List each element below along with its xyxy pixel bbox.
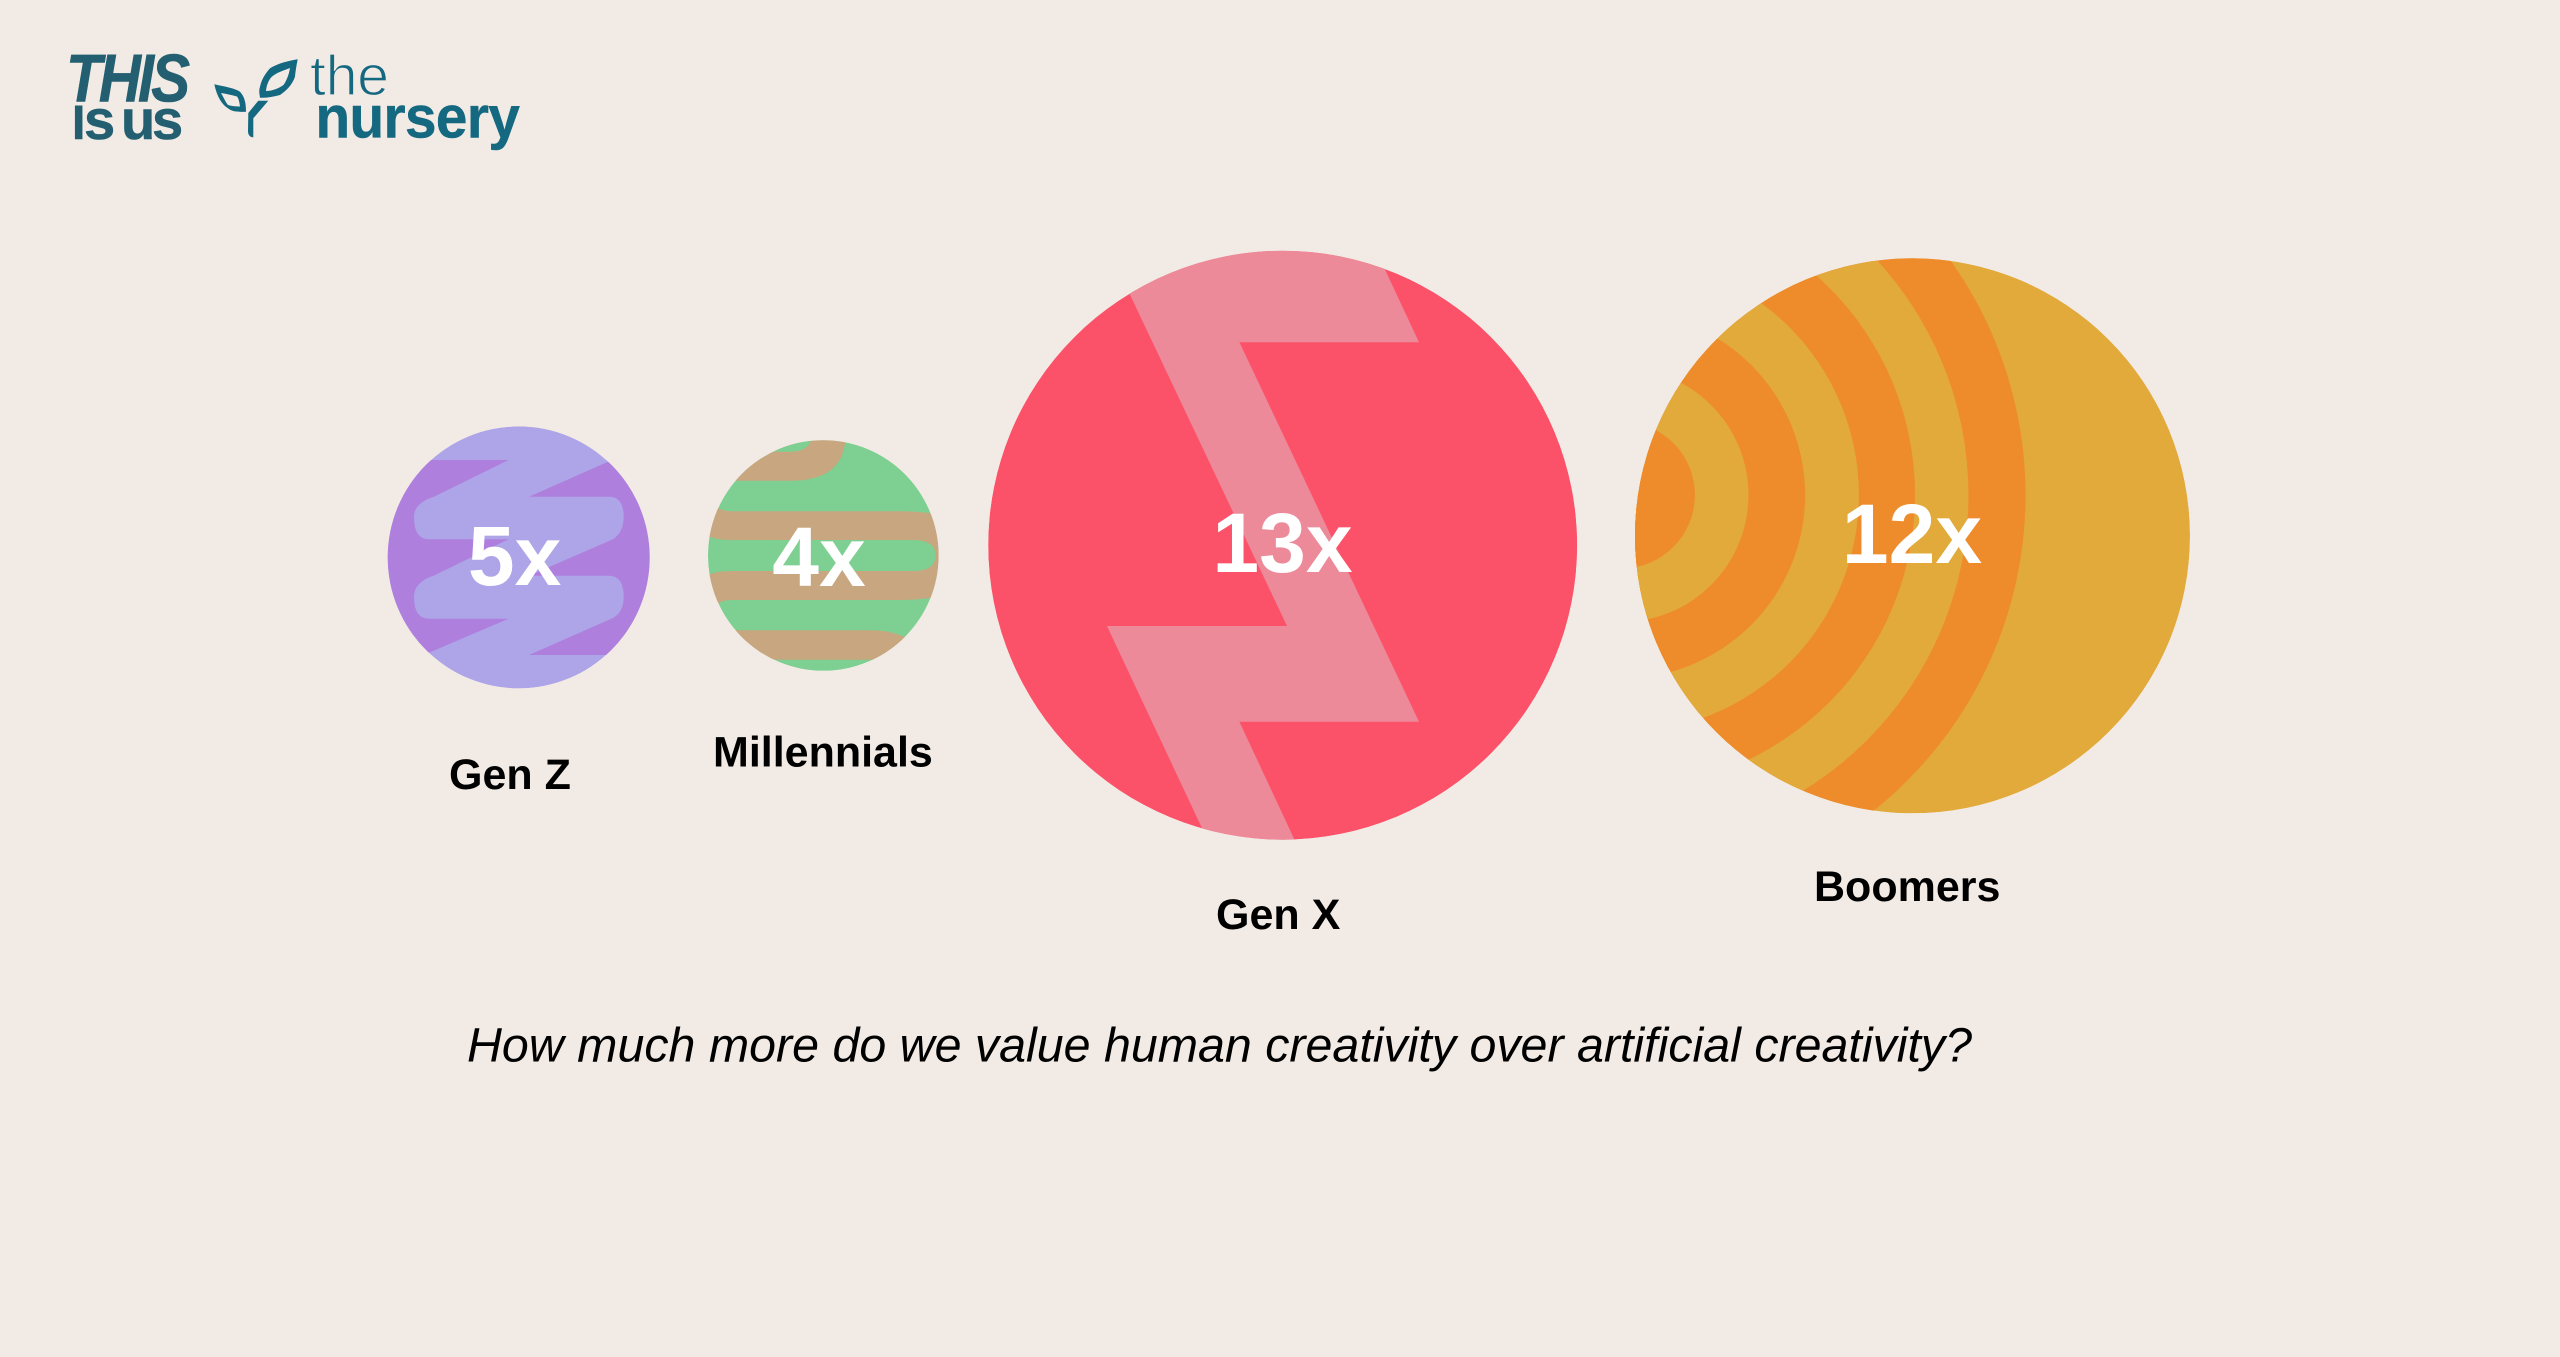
circle: Gen X lightning bolt bbox=[988, 244, 1577, 860]
logo text: is us: Is us bbox=[72, 88, 183, 151]
label: Gen Z: Gen Z bbox=[449, 751, 571, 799]
value: 13x: 13x bbox=[1212, 496, 1353, 590]
caption: question: How much more do we value human creativity over artificial creativity? bbox=[467, 1019, 1972, 1072]
logo: the nursery bbox=[214, 44, 520, 151]
circle: Boomers concentric rings bbox=[1635, 258, 2190, 814]
logo text: nursery: nursery bbox=[316, 85, 520, 151]
value: 12x: 12x bbox=[1842, 487, 1982, 581]
logo: This Is Us bbox=[66, 42, 190, 151]
panel: Gen Z bbox=[388, 426, 650, 790]
value: 4x: 4x bbox=[772, 510, 866, 604]
panel: Gen X bbox=[988, 244, 1577, 939]
logo text: the: the bbox=[310, 44, 389, 108]
label: Boomers: Boomers bbox=[1814, 863, 2000, 911]
icon: sprout bbox=[214, 59, 298, 137]
circle: Gen Z zigzag bbox=[370, 426, 660, 688]
infographic canvas bbox=[70, 54, 2190, 1072]
value: 5x: 5x bbox=[468, 509, 562, 603]
circle: Millennials waves bbox=[708, 440, 939, 671]
panel: Millennials bbox=[708, 440, 939, 767]
label: Gen X: Gen X bbox=[1216, 891, 1341, 939]
label: Millennials: Millennials bbox=[713, 729, 933, 777]
logo text: THIS: THIS bbox=[66, 42, 190, 117]
panel: Boomers bbox=[1635, 258, 2190, 902]
